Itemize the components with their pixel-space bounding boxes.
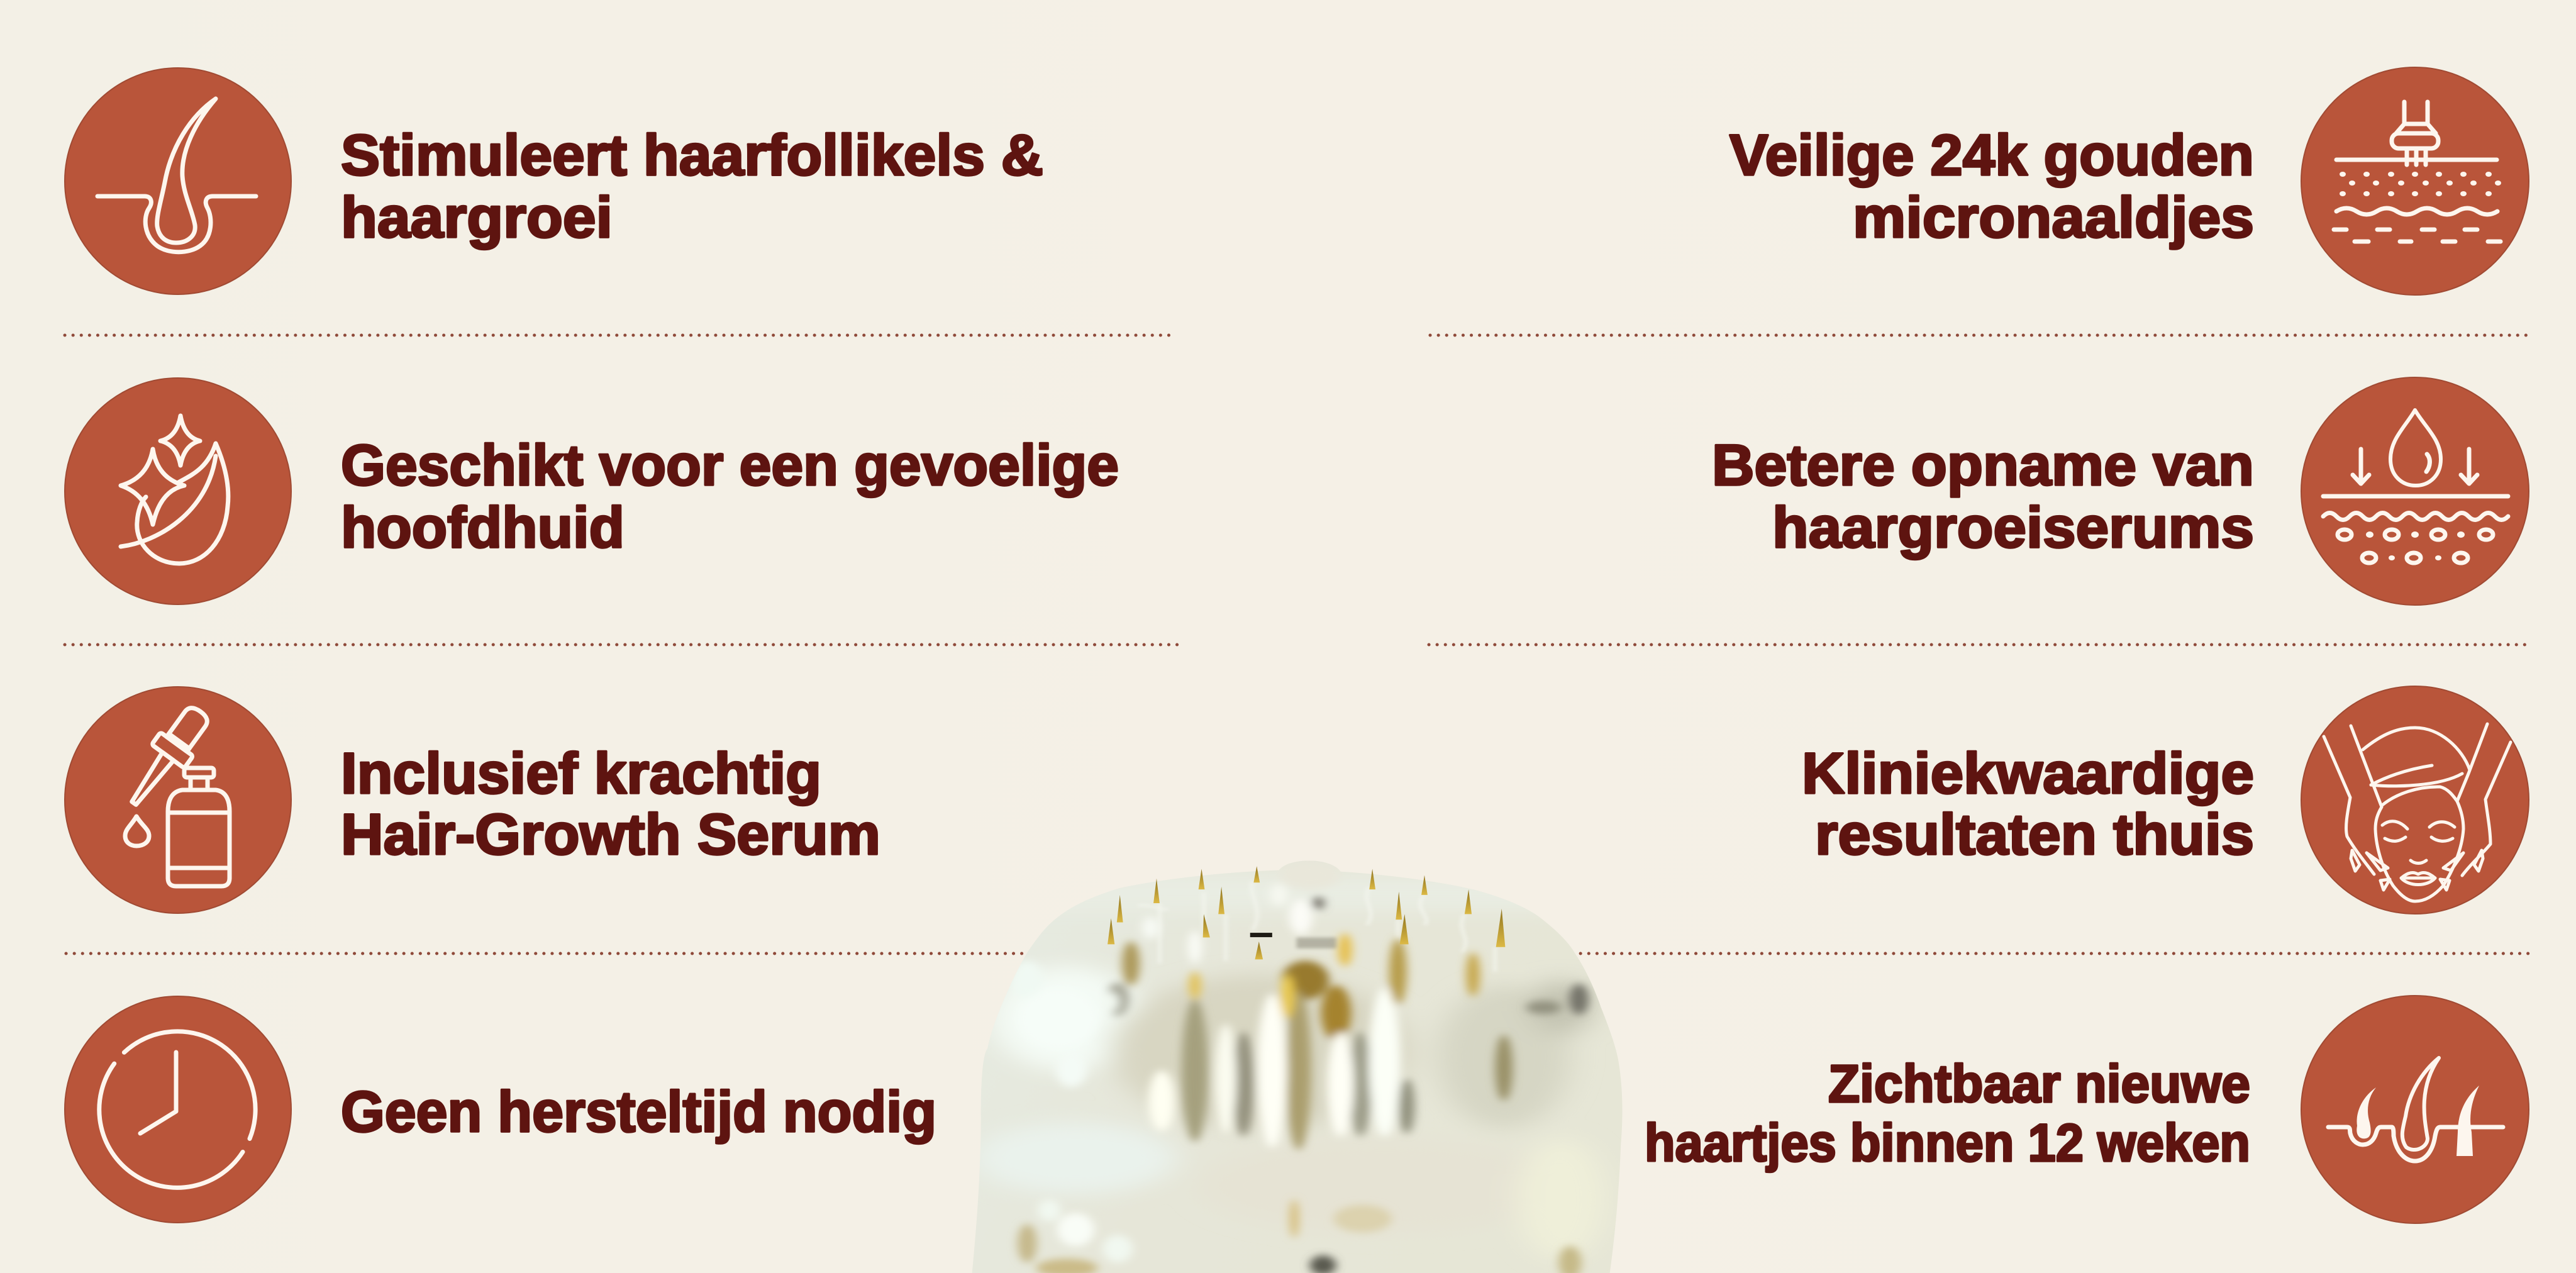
benefit: included serum bbox=[65, 687, 880, 913]
text: benefit label bbox=[341, 123, 1043, 250]
text: benefit label: Inclusief krachtig bbox=[341, 742, 821, 806]
benefit: hair follicle stimulation bbox=[65, 68, 1043, 294]
text: benefit label: Betere opname van bbox=[1712, 433, 2254, 498]
benefit: no recovery time bbox=[65, 996, 936, 1223]
icon: hair follicle bbox=[65, 68, 291, 294]
text: benefit label bbox=[1729, 123, 2254, 250]
text: benefit label bbox=[341, 433, 1119, 560]
text: benefit label bbox=[1802, 742, 2254, 867]
benefit: clinic-level results at home bbox=[1802, 686, 2529, 914]
icon: face with scalp massage bbox=[2301, 686, 2529, 914]
dotted divider: row 3 right bbox=[1572, 952, 2528, 955]
text: benefit label: micronaaldjes bbox=[1853, 186, 2254, 250]
icon: microneedles in skin bbox=[2301, 67, 2529, 295]
text: benefit label: resultaten thuis bbox=[1815, 803, 2254, 867]
benefit: sensitive scalp bbox=[65, 378, 1119, 604]
dotted divider: row 1 right bbox=[1430, 333, 2528, 337]
benefit: safe 24k gold microneedles bbox=[1729, 67, 2529, 295]
benefit: better serum absorption bbox=[1712, 377, 2529, 605]
text: benefit label: hoofdhuid bbox=[341, 496, 625, 560]
text: benefit label: haargroei bbox=[341, 186, 613, 250]
text: benefit label: haartjes binnen 12 weken bbox=[1645, 1113, 2250, 1172]
dotted divider: row 2 right bbox=[1429, 643, 2528, 647]
text: benefit label bbox=[1712, 433, 2254, 560]
text: benefit label: Geen hersteltijd nodig bbox=[341, 1080, 936, 1144]
needles: gold tips bbox=[1108, 866, 1505, 959]
text: benefit label: Veilige 24k gouden bbox=[1729, 123, 2254, 187]
product: gold microneedle stamp head bbox=[943, 843, 1635, 1273]
text: benefit label: Stimuleert haarfollikels & bbox=[341, 123, 1043, 187]
icon: drop absorbed into skin bbox=[2301, 377, 2529, 605]
icon: clock bbox=[65, 996, 291, 1223]
text: benefit label: Zichtbaar nieuwe bbox=[1828, 1054, 2250, 1113]
text: benefit label: Hair-Growth Serum bbox=[341, 803, 880, 867]
benefit: new hair in 12 weeks bbox=[1645, 996, 2529, 1223]
text: benefit label bbox=[341, 742, 880, 867]
icon: leaf with sparkles bbox=[65, 378, 291, 604]
dotted divider: row 1 left bbox=[65, 333, 1174, 337]
text: benefit label bbox=[1645, 1054, 2250, 1172]
text: benefit label: Geschikt voor een gevoelige bbox=[341, 433, 1119, 498]
dotted divider: row 2 left bbox=[65, 643, 1177, 647]
icon: three growing hairs bbox=[2301, 996, 2529, 1223]
text: benefit label: haargroeiserums bbox=[1772, 496, 2254, 560]
dotted divider: row 3 left bbox=[66, 952, 1031, 955]
text: benefit label: Kliniekwaardige bbox=[1802, 742, 2254, 806]
icon: dropper and bottle bbox=[65, 687, 291, 913]
